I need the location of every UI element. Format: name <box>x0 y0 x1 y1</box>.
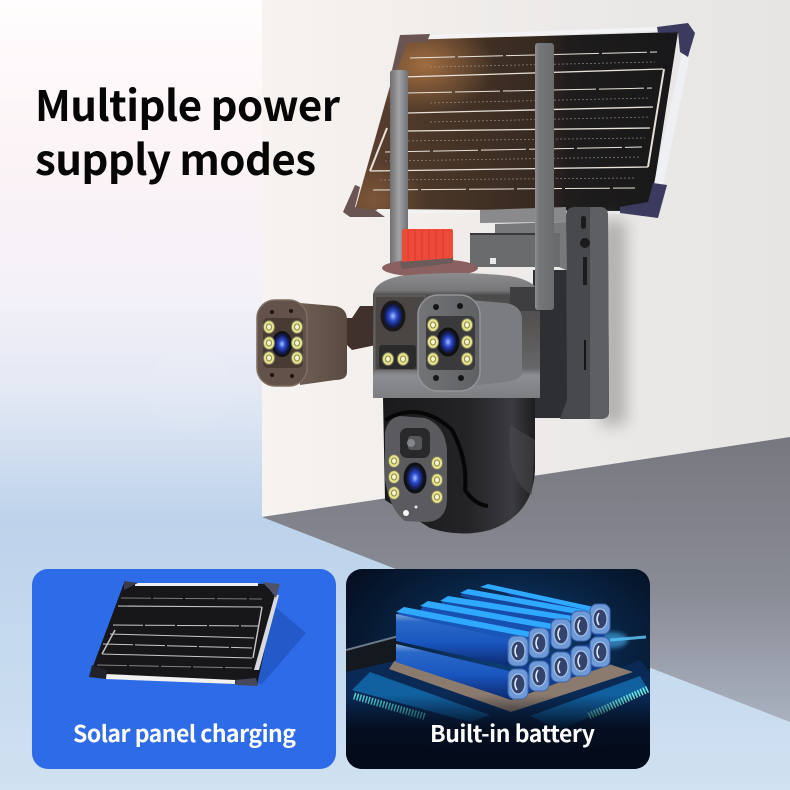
bracket arms <box>480 207 566 223</box>
cell lines <box>370 52 664 190</box>
wall <box>262 0 790 517</box>
panel corners <box>620 23 695 218</box>
card: built-in battery <box>346 569 650 769</box>
left antenna <box>390 70 408 270</box>
upper housing <box>373 273 540 398</box>
card background <box>32 569 336 769</box>
faceplate <box>385 416 447 522</box>
right camera lens <box>438 329 458 355</box>
right camera face <box>418 295 480 391</box>
dome LEDs <box>388 455 400 467</box>
cap neck <box>382 259 478 277</box>
battery end caps <box>508 604 610 699</box>
camera LEDs <box>263 321 275 333</box>
card background <box>346 569 650 769</box>
right camera LEDs <box>427 319 439 331</box>
box shadow <box>600 220 626 425</box>
card solar panel <box>89 581 280 686</box>
card: solar panel charging <box>32 569 336 769</box>
LED pair box <box>379 345 416 369</box>
panel surface <box>355 32 678 212</box>
red cap <box>382 229 478 277</box>
solar panel <box>343 23 695 218</box>
right antenna <box>535 43 554 310</box>
box dark front <box>533 270 573 418</box>
camera lens <box>273 332 291 356</box>
lens flare <box>148 348 232 432</box>
text fade <box>346 695 650 769</box>
title: Multiple power <box>35 73 341 134</box>
center module <box>375 296 425 370</box>
dome body <box>383 398 535 534</box>
housing shell <box>373 273 540 398</box>
wall mount box <box>470 207 626 425</box>
upper lens <box>382 302 404 330</box>
battery front upper cell <box>396 614 509 666</box>
indicators <box>403 510 409 516</box>
dome camera <box>383 398 535 534</box>
title second line: supply modes <box>35 127 316 188</box>
box details <box>581 216 586 229</box>
floor shadow <box>262 437 790 722</box>
red cylinder <box>402 229 453 262</box>
box side <box>560 207 609 419</box>
camera arm <box>340 306 376 350</box>
card panel shadow <box>240 605 306 684</box>
sensor window <box>400 428 430 458</box>
card label: Built-in battery <box>430 715 595 749</box>
camera body <box>300 303 347 385</box>
card label: Solar panel charging <box>73 715 296 749</box>
battery cells lower row <box>396 640 610 699</box>
camera face <box>257 300 307 386</box>
connector <box>510 287 540 311</box>
battery cells upper back row <box>396 584 605 656</box>
sun glow <box>356 38 489 210</box>
circuit board <box>346 632 650 769</box>
panel frame <box>430 27 658 39</box>
dome lens <box>405 464 425 492</box>
right camera body <box>470 300 522 386</box>
side camera <box>257 300 376 386</box>
